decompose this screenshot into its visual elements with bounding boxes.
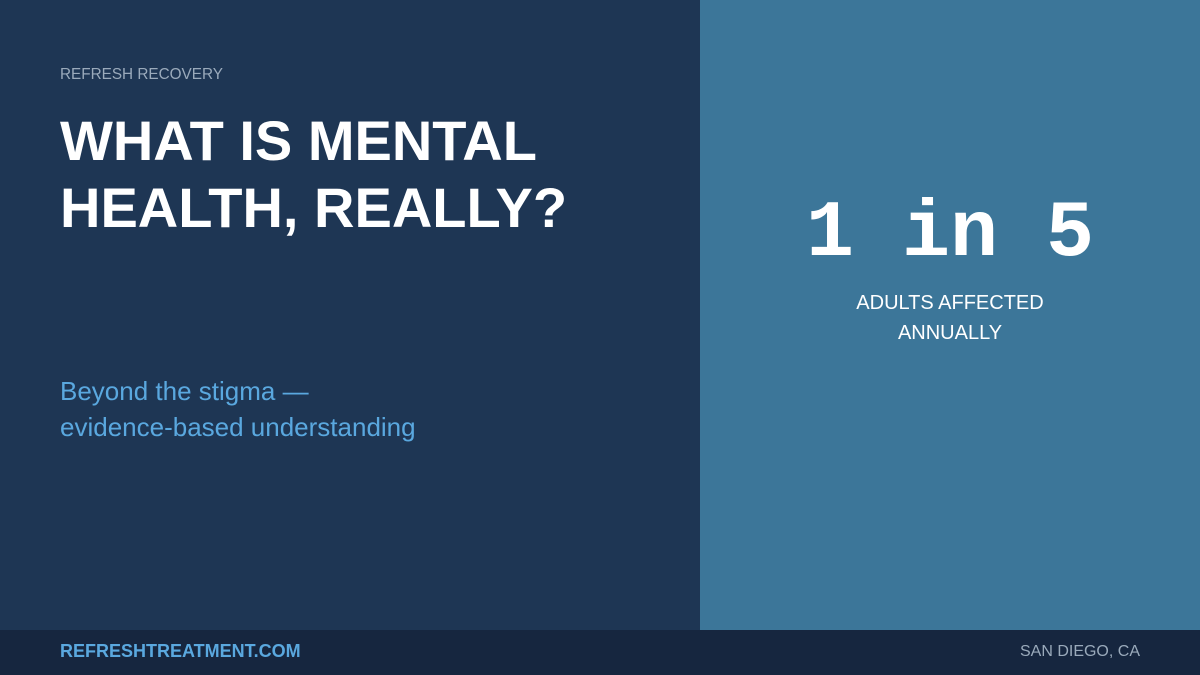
subtitle: evidence-based understanding — [60, 412, 416, 442]
subtitle: Beyond the stigma — — [60, 376, 309, 406]
title — [60, 109, 567, 239]
panel: stat — [700, 0, 1200, 630]
stat label: ANNUALLY — [898, 322, 1002, 344]
location: SAN DIEGO, CA — [1020, 643, 1140, 660]
subtitle — [60, 376, 416, 442]
footer — [0, 630, 1200, 675]
panel: left — [0, 0, 700, 630]
brand label: REFRESH RECOVERY — [60, 66, 223, 83]
stat label: ADULTS AFFECTED — [856, 292, 1044, 314]
stat number: 1 in 5 — [806, 189, 1094, 280]
stat label — [856, 292, 1044, 344]
website: REFRESHTREATMENT.COM — [60, 641, 301, 661]
title: WHAT IS MENTAL — [60, 109, 537, 172]
title: HEALTH, REALLY? — [60, 176, 567, 239]
